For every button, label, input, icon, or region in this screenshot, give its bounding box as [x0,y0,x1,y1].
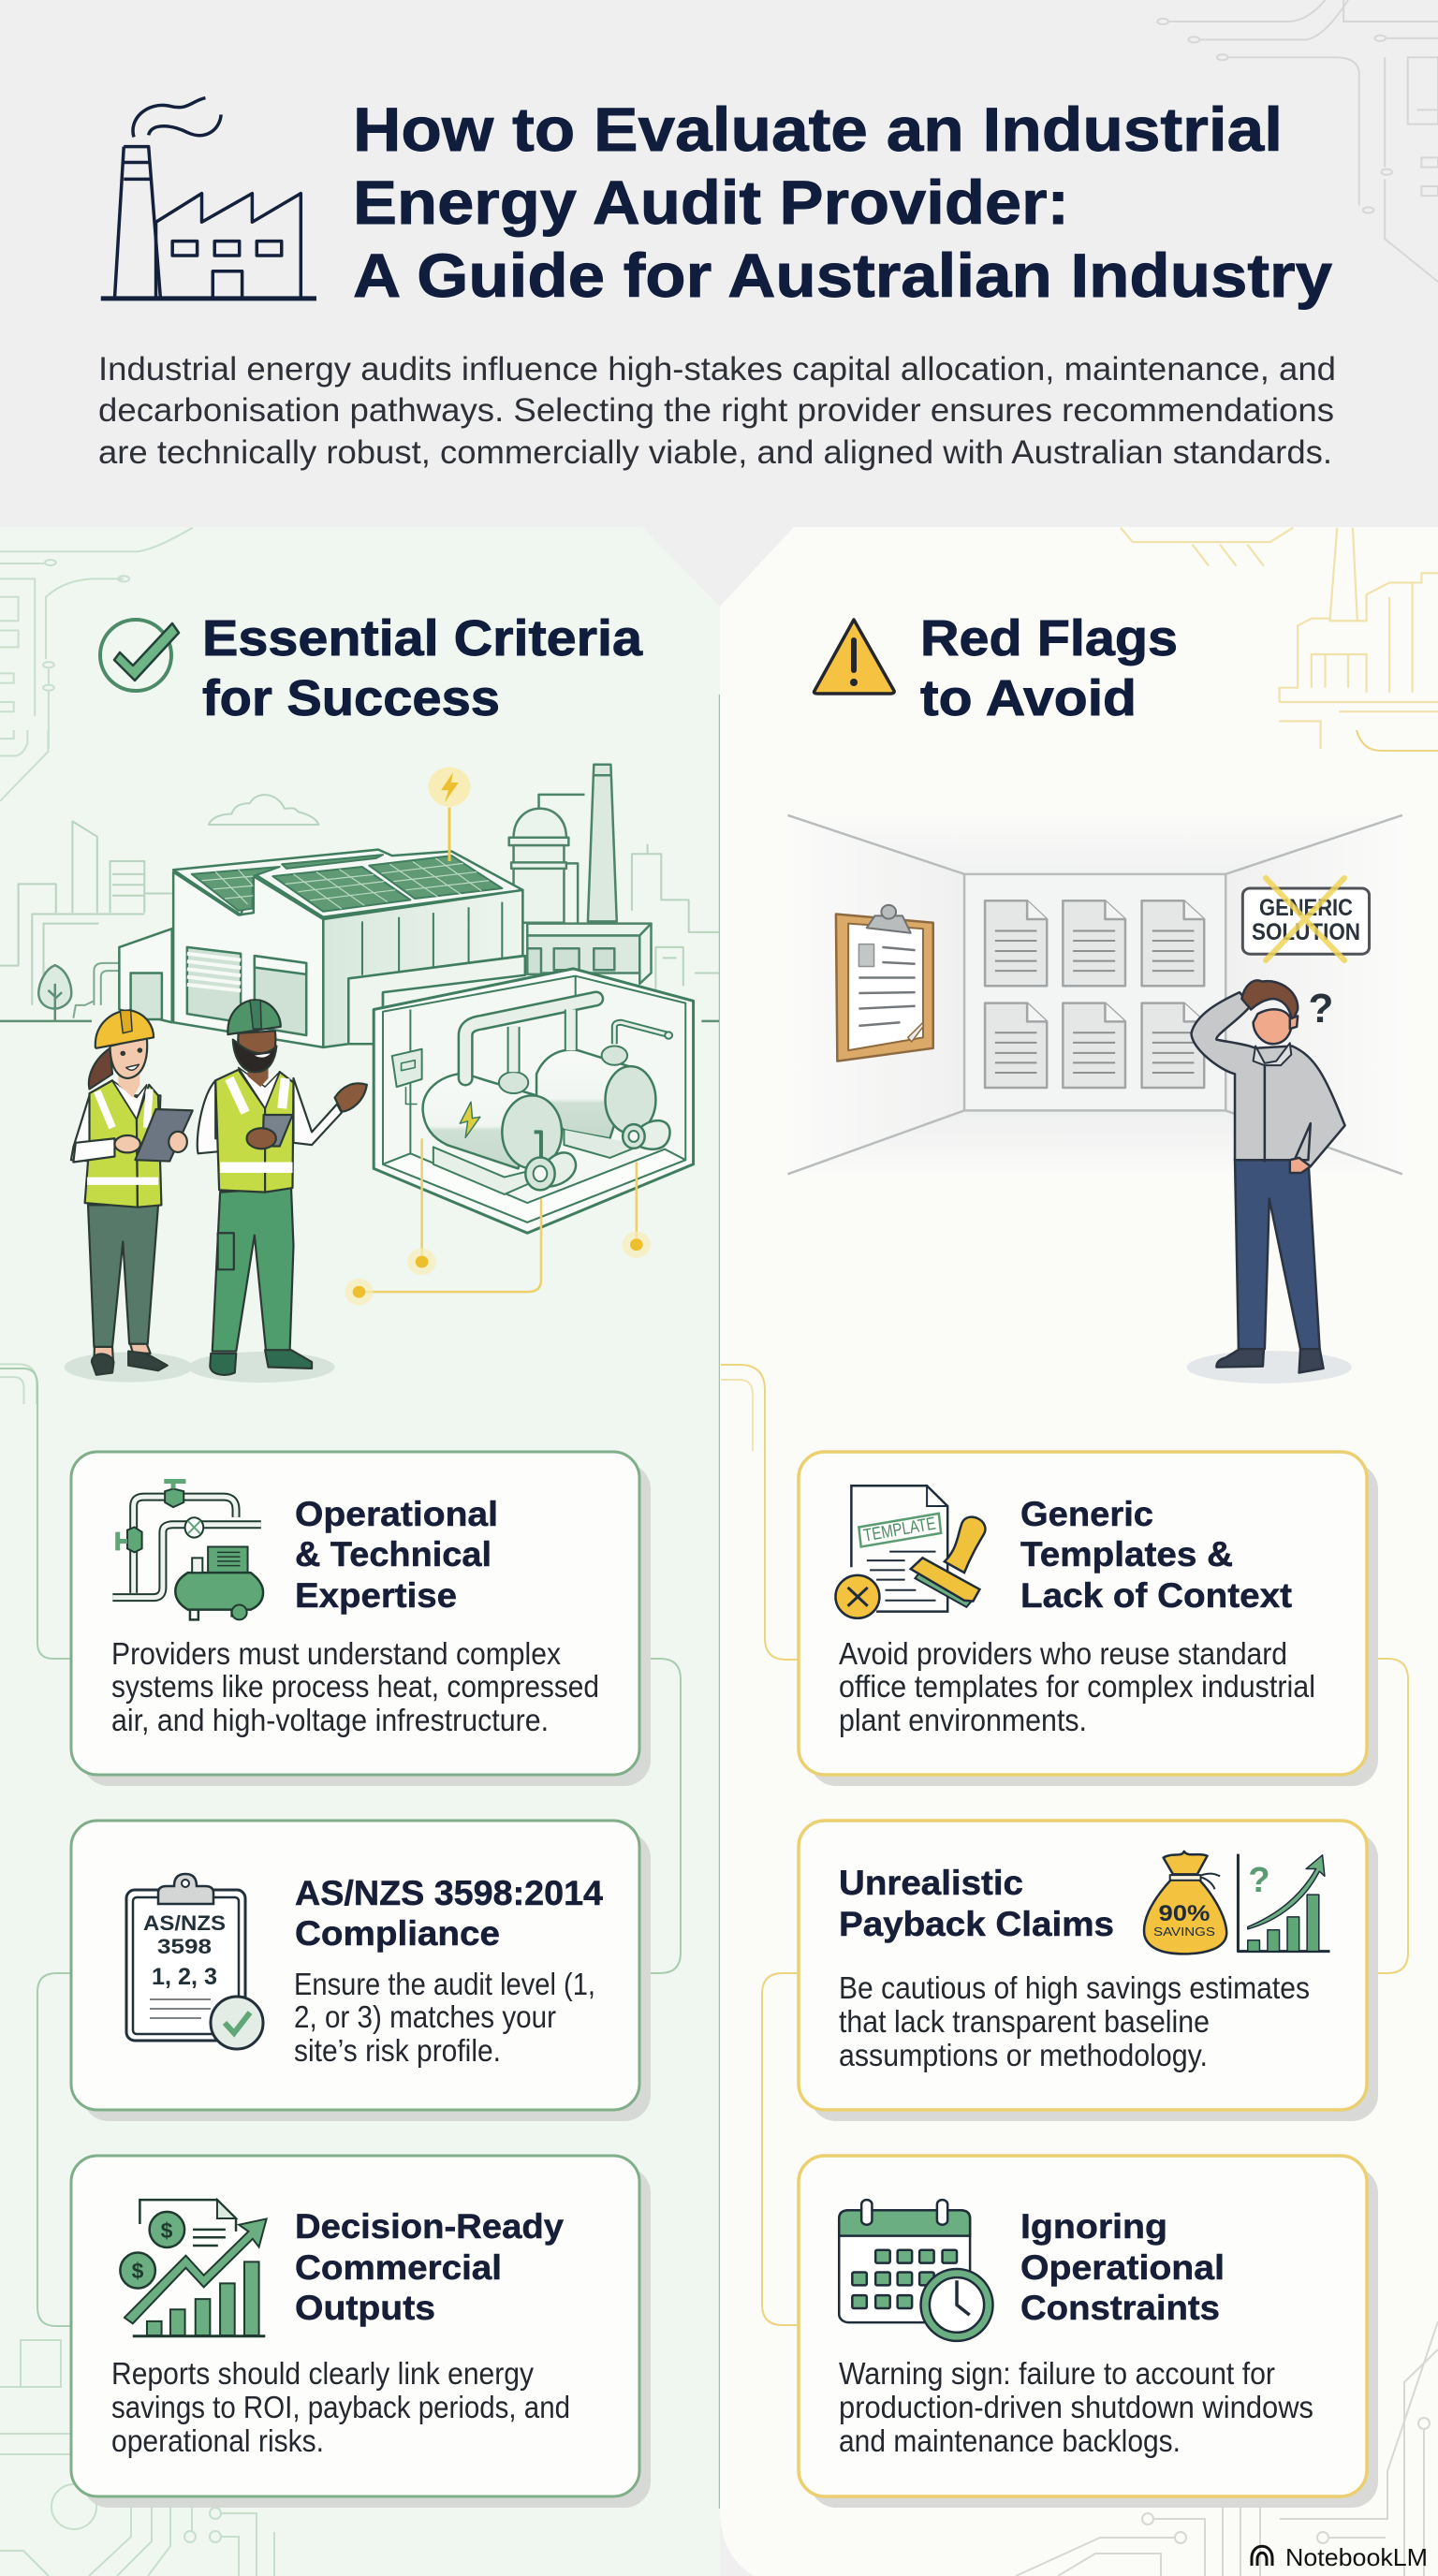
panel: essential criteria [0,527,720,2576]
card text: site’s risk profile. [294,2033,501,2068]
card text: office templates for complex industrial [839,1669,1315,1704]
icon: money bag and growth chart: 90% [1159,1901,1210,1926]
back plant [509,765,652,984]
card title [295,2207,564,2327]
icon: compliance clipboard: AS/NZS [143,1911,226,1935]
card text: Providers must understand complex [111,1636,561,1671]
wall documents [985,900,1204,1088]
card: operational and technical expertise [71,1452,651,1786]
card text: savings to ROI, payback periods, and [111,2390,570,2424]
card text [839,1636,1315,1737]
card title [1020,2207,1225,2327]
clipboard [836,905,933,1061]
card title: Outputs [295,2289,435,2327]
main factory [119,850,525,1047]
card title: Operational [295,1495,498,1533]
question mark: ? [1309,986,1333,1032]
sign text: GENERIC [1259,895,1353,921]
icon: compliance clipboard: 1, 2, 3 [152,1964,217,1990]
icon: warning triangle [814,620,894,694]
card text: Avoid providers who reuse standard [839,1636,1287,1671]
sign text: SOLUTION [1252,919,1360,945]
card text [839,2356,1313,2458]
icon: check circle [100,620,179,691]
card text: 2, or 3) matches your [294,1999,556,2034]
intro text: decarbonisation pathways. Selecting the right provider ensures recommendations [98,392,1334,429]
intro text: are technically robust, commercially viable, and aligned with Australian standards. [98,434,1332,471]
icon: compliance clipboard: 3598 [157,1935,212,1958]
person shadow [1187,1351,1352,1383]
card text [839,1970,1310,2072]
section heading: essential criteria: Essential Criteria [202,610,643,666]
title: Energy Audit Provider: [353,168,1069,237]
tree [38,965,71,1020]
title [353,95,1332,310]
card: unrealistic payback [799,1821,1378,2121]
card text: operational risks. [111,2423,324,2458]
card title [295,1874,603,1953]
card text: plant environments. [839,1703,1087,1737]
icon: financial report [120,2200,267,2336]
woman auditor [71,1010,193,1375]
card title: Operational [1020,2248,1225,2287]
card title [1020,1495,1292,1615]
intro text [98,351,1336,471]
icon: compliance clipboard [126,1874,263,2049]
icon: money bag and growth chart: ? [1248,1861,1270,1900]
icon: financial report: $ [161,2218,173,2243]
card title: AS/NZS 3598:2014 [295,1874,603,1912]
intro text: Industrial energy audits influence high-stakes capital allocation, maintenance, and [98,351,1336,388]
confused man [1191,980,1345,1373]
back tank [536,1050,633,1138]
skyline [0,795,719,1005]
sign text [1252,895,1360,945]
illustration: factory with auditors [0,765,719,1383]
circuit decoration top left [0,528,193,749]
card title: Generic [1020,1495,1153,1533]
section heading: red flags [920,610,1178,726]
card title [295,1495,498,1615]
section heading: red flags: to Avoid [920,670,1137,726]
card text: and maintenance backlogs. [839,2423,1181,2458]
icon: financial report: $ [132,2259,144,2283]
card title: Commercial [295,2248,502,2287]
card title: Templates & [1020,1535,1233,1573]
card text: Reports should clearly link energy [111,2356,534,2391]
power lines [360,1138,637,1292]
title: A Guide for Australian Industry [353,241,1332,310]
man auditor [198,1000,367,1375]
card text [294,1967,595,2068]
card title: Expertise [295,1576,457,1615]
card text: assumptions or methodology. [839,2038,1208,2072]
card title: Ignoring [1020,2207,1167,2246]
card title [839,1864,1114,1943]
card text [111,1636,599,1737]
card title: Compliance [295,1914,500,1953]
card text: Warning sign: failure to account for [839,2356,1275,2391]
plant room cutaway [374,969,694,1233]
NotebookLM watermark: NotebookLM [1285,2543,1428,2571]
energy node [428,767,471,861]
card: compliance [71,1821,651,2121]
panel: red flags [720,527,1438,2576]
illustration: generic templates room [787,815,1402,1383]
icon: template and stamp [835,1486,985,1618]
card title: Lack of Context [1020,1576,1292,1615]
front tank [423,1073,536,1168]
card: generic templates [799,1452,1378,1786]
card text: Ensure the audit level (1, [294,1967,595,2001]
card title: Constraints [1020,2289,1220,2327]
title: How to Evaluate an Industrial [353,95,1283,164]
card title: Decision-Ready [295,2207,564,2246]
card text: that lack transparent baseline [839,2004,1210,2039]
connector lines: yellow [721,730,1438,2325]
yellow cross [1266,878,1344,960]
icon: pipes and compressor [112,1481,263,1619]
card text [111,2356,570,2458]
card text: Be cautious of high savings estimates [839,1970,1310,2005]
card: operational constraints [799,2156,1378,2508]
section heading: essential criteria: for Success [202,670,500,726]
icon: money bag and growth chart [1144,1852,1330,1954]
section heading: essential criteria [202,610,643,726]
card text: air, and high-voltage infrestructure. [111,1703,549,1737]
card text: systems like process heat, compressed [111,1669,599,1704]
circuit decoration bottom left [0,2340,274,2576]
ground shadows [65,1352,335,1383]
electrical box [392,1049,422,1087]
icon: money bag and growth chart: SAVINGS [1153,1925,1215,1939]
card title: Unrealistic [839,1864,1023,1902]
sign frame [1242,888,1370,954]
icon: template and stamp: TEMPLATE [862,1514,937,1546]
card title: Payback Claims [839,1905,1114,1943]
card title: & Technical [295,1535,492,1573]
room [787,815,1402,1174]
connector lines: green [0,1368,681,2326]
circuit decoration top right [1121,528,1438,749]
section heading: red flags: Red Flags [920,610,1178,666]
pipes [465,999,596,1078]
circuit decoration bottom right [1016,2321,1438,2576]
icon: factory [101,98,316,299]
card text: production-driven shutdown windows [839,2390,1313,2424]
solar panels [192,855,502,912]
icon: calendar and clock [839,2200,993,2341]
card: commercial outputs [71,2156,651,2508]
